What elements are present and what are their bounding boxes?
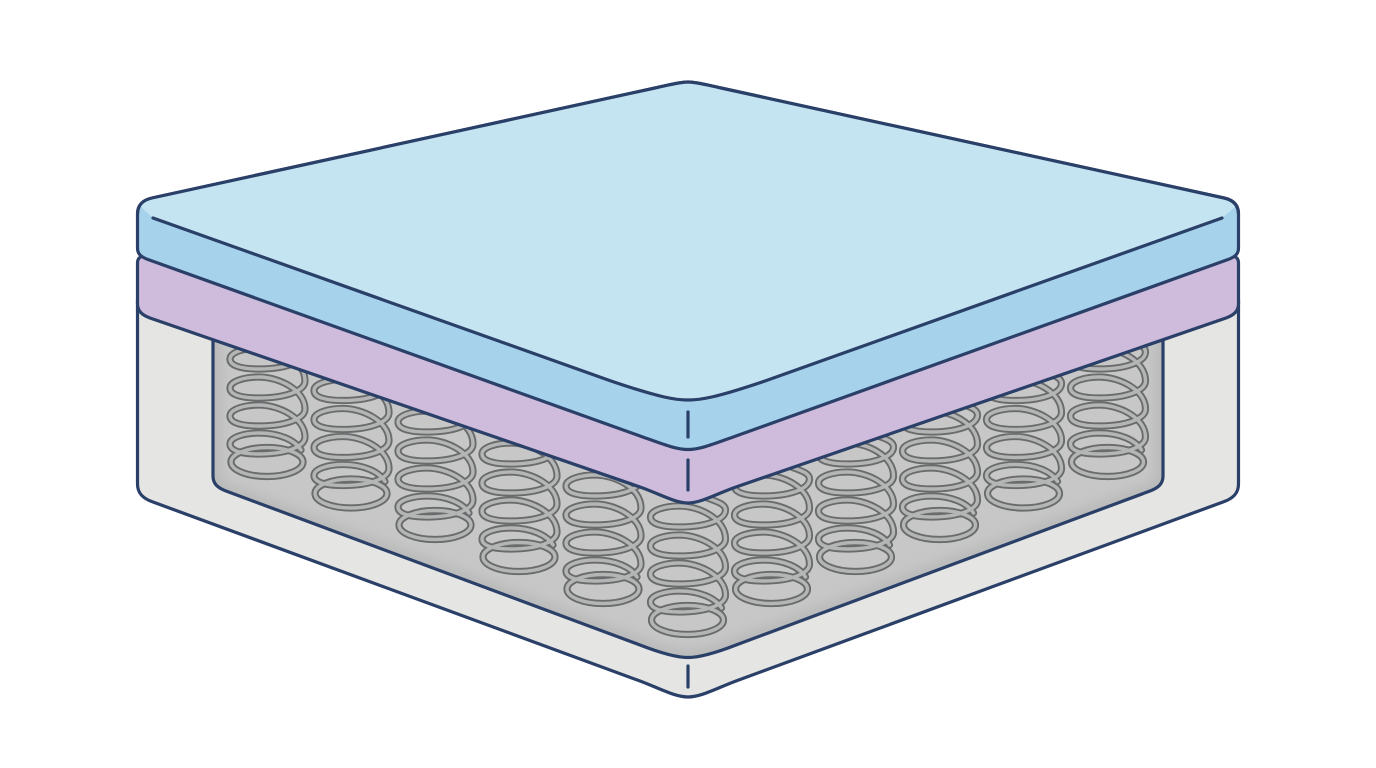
light top face: [140, 82, 1236, 400]
base layer: white support shell: [138, 300, 1238, 697]
illustration: layered mattress cutaway: [136, 80, 1240, 699]
seam: purple layer: [686, 460, 690, 490]
coil springs: eleven columns: [230, 340, 1146, 634]
inner edge line of top face: [153, 218, 1222, 400]
top layer: blue cover: [138, 82, 1238, 450]
seam: base layer: [686, 666, 690, 687]
cavity with coil springs: [213, 330, 1163, 658]
middle layer: purple comfort foam: [138, 256, 1238, 503]
seam: blue layer: [686, 412, 690, 437]
blue front faces: [138, 82, 1238, 450]
top edge outline: [138, 82, 1238, 214]
cavity outline: [213, 330, 1163, 658]
